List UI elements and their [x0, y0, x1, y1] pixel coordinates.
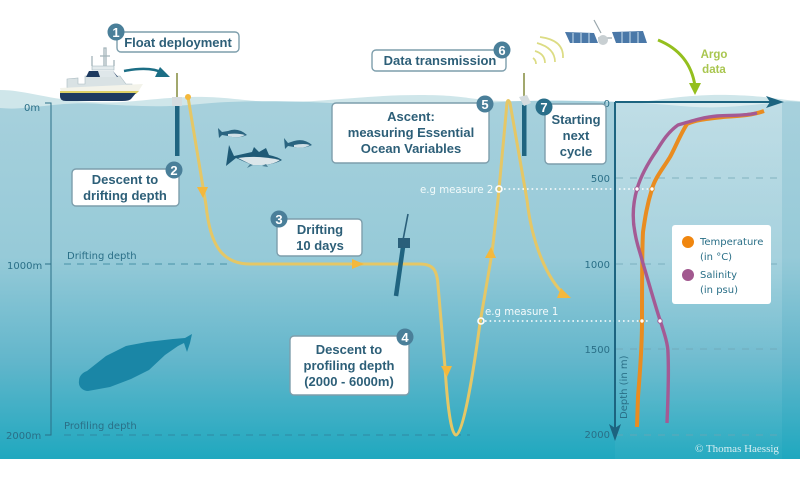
- callout 3: drifting 10 days: 10 days: [296, 238, 344, 253]
- callout 4: descent to profiling depth: [290, 328, 414, 395]
- callout 1: float deployment: 1: [112, 25, 120, 40]
- chart: temperature and salinity profiles: 0: [604, 99, 610, 110]
- icon: tuna fish small: [218, 128, 247, 138]
- icon: sperm whale: [79, 334, 192, 391]
- callout 6: data transmission: 6: [498, 43, 506, 58]
- callout 3: drifting 10 days: 3: [275, 212, 283, 227]
- callout 2: descent to drifting depth: [72, 162, 182, 206]
- left depth scale: 2000m: [6, 431, 41, 442]
- chart legend: (in psu): [700, 285, 738, 296]
- callout 4: descent to profiling depth: profiling depth: [304, 358, 395, 373]
- credit: © Thomas Haessig: [695, 443, 779, 455]
- callout 7: starting next cycle: 7: [540, 100, 548, 115]
- float path: [185, 94, 571, 435]
- callout 6: data transmission: Data transmission: [384, 53, 496, 68]
- chart legend: [672, 225, 771, 304]
- profiling depth line and label: Profiling depth: [64, 421, 137, 432]
- chart legend: Temperature: [699, 237, 763, 248]
- callout 5: ascent: Ascent:: [387, 109, 435, 124]
- callout 4: descent to profiling depth: (2000 - 6000m): [304, 374, 394, 389]
- icon: signal waves: [533, 37, 563, 64]
- measure lines: e.g measure 2: [420, 185, 493, 196]
- icon: research ship: [60, 48, 143, 101]
- callout 5: ascent: measuring Essential: [348, 125, 474, 140]
- callout 1: float deployment: [108, 24, 239, 52]
- callout 4: descent to profiling depth: 4: [401, 330, 409, 345]
- ocean background: [0, 90, 800, 459]
- callout 7: starting next cycle: Starting: [551, 112, 601, 127]
- callout 3: drifting 10 days: [270, 210, 362, 256]
- arrow: Argo data: [658, 40, 701, 95]
- callout 3: drifting 10 days: Drifting: [297, 222, 343, 237]
- arrow: deployment: [124, 67, 170, 77]
- chart: temperature and salinity profiles: [585, 96, 784, 441]
- callout 5: ascent: Ocean Variables: [361, 141, 461, 156]
- callout 5: ascent: [332, 96, 494, 163]
- callout 2: descent to drifting depth: Descent to: [92, 172, 158, 187]
- icon: tuna fish right: [284, 138, 312, 149]
- Argo data label: Argo: [701, 49, 727, 61]
- icon: float at surface right: [519, 73, 531, 156]
- callout 7: starting next cycle: [536, 98, 606, 164]
- left depth scale: 0m: [24, 103, 40, 114]
- Argo data label: data: [702, 64, 726, 76]
- callout 7: starting next cycle: next: [563, 128, 590, 143]
- callout 5: ascent: 5: [481, 97, 489, 112]
- left depth scale: 1000m: [7, 261, 42, 272]
- chart: temperature and salinity profiles: 2000: [585, 430, 610, 441]
- left depth scale: [6, 103, 51, 442]
- callout 6: data transmission: [372, 42, 510, 71]
- chart: temperature and salinity profiles: Depth (in m): [619, 355, 630, 419]
- chart legend: (in °C): [700, 252, 732, 263]
- icon: float at surface: [172, 73, 182, 156]
- callout 1: float deployment: Float deployment: [124, 35, 232, 50]
- chart legend: Salinity: [700, 270, 737, 281]
- measure lines: [420, 185, 652, 324]
- callout 2: descent to drifting depth: drifting depth: [83, 188, 167, 203]
- icon: tuna fish large: [226, 145, 282, 168]
- measure lines: e.g measure 1: [485, 307, 558, 318]
- chart panel background: [615, 102, 782, 459]
- chart: temperature and salinity profiles: 1000: [585, 260, 610, 271]
- drifting depth line and label: Drifting depth: [67, 251, 137, 262]
- callout 2: descent to drifting depth: 2: [170, 163, 178, 178]
- callout 4: descent to profiling depth: Descent to: [316, 342, 382, 357]
- callout 7: starting next cycle: cycle: [560, 144, 592, 159]
- chart: temperature and salinity profiles: 500: [591, 174, 610, 185]
- chart: temperature and salinity profiles: 1500: [585, 345, 610, 356]
- icon: drifting float: [396, 214, 410, 296]
- icon: satellite: [565, 20, 647, 45]
